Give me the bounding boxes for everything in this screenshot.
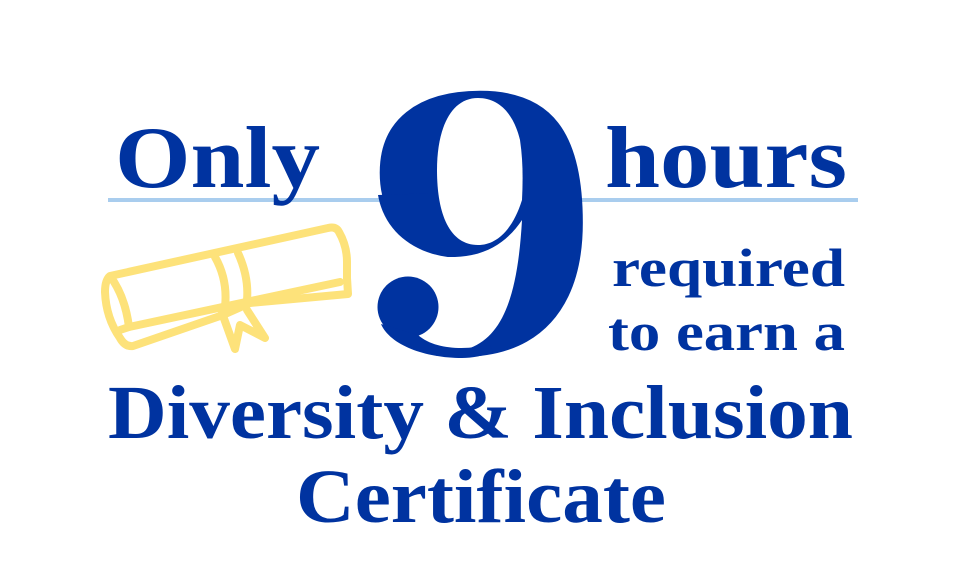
heading: Diversity & Inclusion Certificate bbox=[108, 371, 853, 539]
big number 9: 9 bbox=[367, 1, 600, 439]
word: Only: Only bbox=[115, 110, 320, 207]
icon: diploma scroll bbox=[105, 228, 348, 349]
line: Certificate: Certificate bbox=[296, 455, 666, 539]
line: to earn a: to earn a bbox=[608, 302, 845, 362]
word: hours: hours bbox=[605, 110, 847, 207]
line: required: required bbox=[612, 238, 845, 298]
divider line bbox=[108, 198, 858, 202]
text: required to earn a bbox=[608, 238, 845, 362]
line: Diversity & Inclusion: Diversity & Inclusion bbox=[108, 371, 853, 455]
